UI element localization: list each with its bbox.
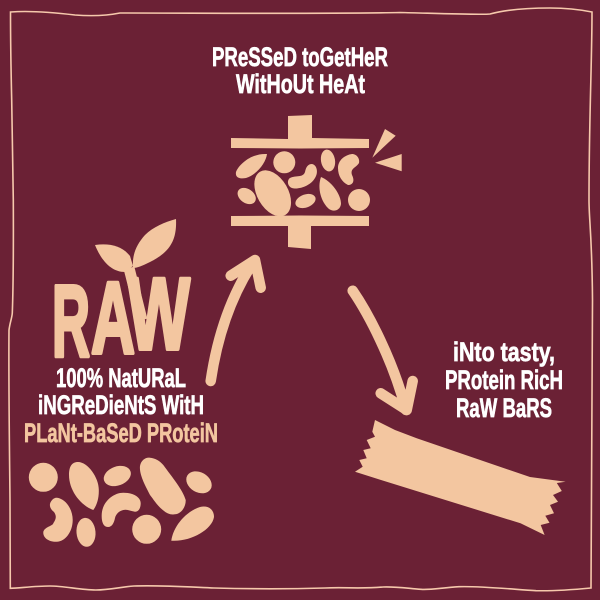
text: into tasty protein rich raw bars: [445, 337, 563, 423]
arrow: up to press: [211, 260, 261, 381]
pressure sparks: [372, 129, 402, 171]
text: 100% natural ingredients with plant-based protein: iNGReDieNtS WitH: [38, 390, 204, 420]
text: 100% natural ingredients with plant-based protein: PLaNt-BaSeD PRoteiN: [24, 418, 218, 448]
heading: pressed together without heat: PReSSeD toGetHeR: [212, 42, 388, 72]
arrow: down to bar: [353, 291, 413, 410]
heading: pressed together without heat: [212, 42, 388, 99]
text: into tasty protein rich raw bars: iNto tasty,: [453, 337, 555, 367]
nuts squeezed in press: [234, 148, 370, 223]
heading: pressed together without heat: WitHoUt HeAt: [236, 69, 365, 99]
text: 100% natural ingredients with plant-based protein: [24, 363, 218, 448]
sprout leaves: [95, 219, 176, 320]
text: into tasty protein rich raw bars: RaW BaRS: [456, 393, 552, 423]
icon: loose nuts: [29, 458, 216, 548]
icon: press with nuts: [231, 115, 402, 249]
RAW lettering: [52, 257, 190, 378]
text: 100% natural ingredients with plant-based protein: 100% NatURaL: [56, 363, 186, 393]
RAW lettering: R: [52, 264, 90, 378]
press top plate: [231, 115, 369, 148]
logo: RAW with leaves: [52, 219, 190, 378]
RAW lettering: A: [91, 261, 135, 375]
RAW lettering: W: [128, 257, 190, 371]
icon: wrapped protein bar: [355, 420, 566, 535]
press bottom plate: [231, 216, 369, 249]
